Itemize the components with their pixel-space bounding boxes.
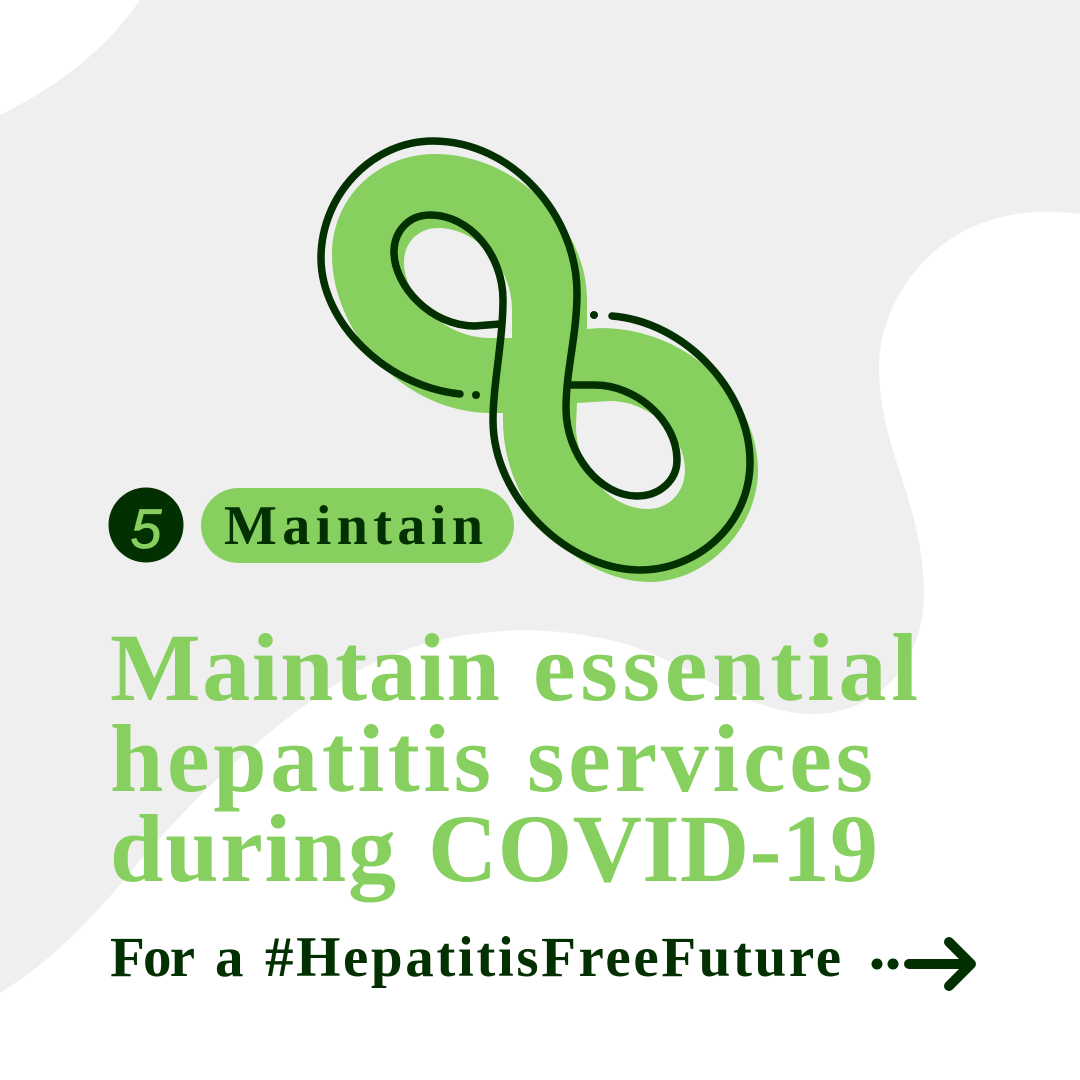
dark ribbon outline [321, 141, 750, 570]
title: services [527, 705, 873, 812]
hashtag line: a [215, 926, 244, 989]
title: Maintain [110, 614, 500, 721]
title: hepatitis [110, 705, 491, 812]
green ribbon fill [332, 154, 758, 582]
step number badge [108, 488, 184, 562]
title: essential [533, 614, 918, 721]
title: during [110, 795, 396, 902]
step label pill: Maintain [224, 495, 483, 557]
title: COVID-19 [428, 795, 878, 902]
hashtag line: For [110, 926, 195, 989]
title [110, 614, 918, 902]
icon: infinity ribbon [321, 141, 758, 582]
step label pill [201, 488, 514, 563]
step number badge: 5 [130, 497, 162, 560]
hashtag line: #HepatitisFreeFuture [265, 926, 841, 989]
arrow [872, 942, 971, 986]
